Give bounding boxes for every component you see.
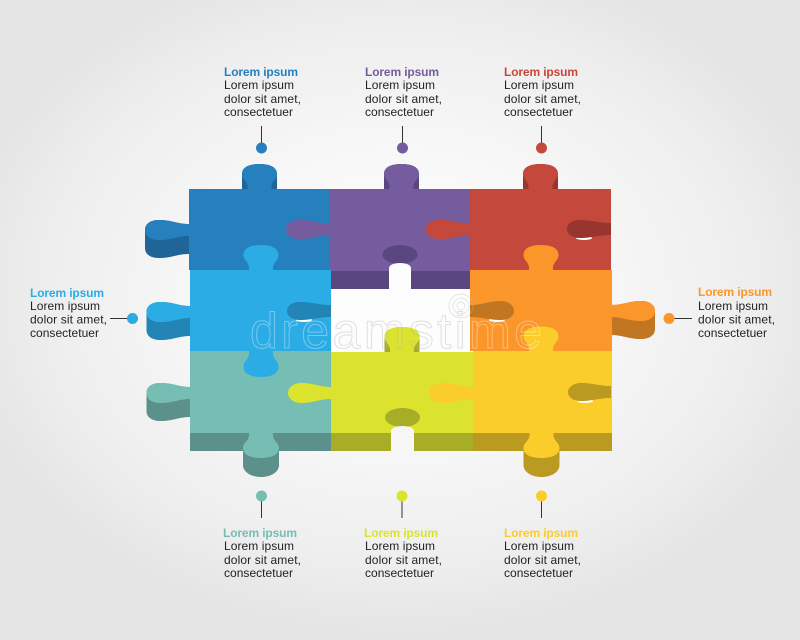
keyhole: orange into red bbox=[524, 245, 558, 270]
text block: top blue: Lorem ipsum bbox=[224, 78, 294, 92]
central empty slot bbox=[331, 285, 471, 353]
knob: yellow green into empty slot bbox=[384, 327, 420, 352]
text block: top purple: Lorem ipsum bbox=[365, 65, 439, 79]
right knob: orange bbox=[611, 301, 655, 339]
piece: light blue bbox=[190, 270, 331, 352]
text block: bottom yellow bbox=[504, 526, 581, 580]
text block: left: Lorem ipsum bbox=[30, 286, 104, 300]
text block: right: Lorem ipsum bbox=[698, 285, 772, 299]
text block: top purple bbox=[365, 65, 442, 119]
text block: top red bbox=[504, 65, 581, 119]
watermark: dreamstime bbox=[250, 303, 542, 359]
tab: red into purple bbox=[426, 220, 471, 239]
text block: bottom yellow: consectetuer bbox=[504, 566, 573, 580]
text block: right: dolor sit amet, bbox=[698, 312, 775, 326]
piece: purple bbox=[330, 189, 470, 289]
keyhole: light blue into teal bbox=[244, 351, 278, 377]
left knob: light blue bbox=[146, 302, 190, 340]
keyhole: yellow into orange bbox=[524, 326, 558, 352]
watermark bbox=[252, 294, 540, 349]
piece: orange bbox=[470, 270, 612, 351]
tab: yellow into yellow green bbox=[429, 383, 474, 403]
text block: bottom teal: Lorem ipsum bbox=[224, 539, 294, 553]
bottom knob: yellow bbox=[524, 445, 560, 477]
text block: left bbox=[30, 286, 107, 340]
keyhole: yellow bottom knob top face bbox=[524, 433, 560, 458]
text block: right: consectetuer bbox=[698, 326, 767, 340]
tab: purple into blue bbox=[286, 220, 331, 239]
piece: blue bbox=[189, 189, 331, 270]
top knob: purple bbox=[384, 164, 419, 189]
text block: bottom yellow: dolor sit amet, bbox=[504, 553, 581, 567]
text block: bottom yellow: Lorem ipsum bbox=[504, 539, 574, 553]
text block: bottom teal: consectetuer bbox=[224, 566, 293, 580]
socket: yellow right bbox=[568, 383, 611, 403]
watermark: dreamstime bbox=[250, 303, 542, 359]
left knob: blue bbox=[145, 220, 189, 258]
text block: top purple: dolor sit amet, bbox=[365, 92, 442, 106]
text block: left: Lorem ipsum bbox=[30, 299, 100, 313]
text block: bottom teal: dolor sit amet, bbox=[224, 553, 301, 567]
text block: top blue: Lorem ipsum bbox=[224, 65, 298, 79]
connector: bottom yellow bbox=[536, 490, 547, 518]
connector: bottom teal bbox=[256, 490, 267, 518]
connector: top blue bbox=[256, 126, 267, 154]
text block: top blue: consectetuer bbox=[224, 105, 293, 119]
piece: yellow green bbox=[331, 352, 473, 451]
keyhole: light blue into blue bbox=[244, 245, 278, 270]
text block: top red: consectetuer bbox=[504, 105, 573, 119]
text block: top blue: dolor sit amet, bbox=[224, 92, 301, 106]
text block: bottom teal bbox=[223, 526, 301, 580]
text block: top red: Lorem ipsum bbox=[504, 78, 574, 92]
socket: red right bbox=[567, 220, 611, 240]
text block: top purple: Lorem ipsum bbox=[365, 78, 435, 92]
piece: red bbox=[470, 189, 611, 270]
socket: light blue right bbox=[287, 302, 331, 322]
piece: yellow bbox=[473, 351, 612, 451]
top knob: blue bbox=[242, 164, 277, 189]
text block: top blue bbox=[224, 65, 301, 119]
tab: yellow green into teal bbox=[288, 383, 332, 403]
text block: bottom yellow green bbox=[364, 526, 442, 580]
text block: top red: dolor sit amet, bbox=[504, 92, 581, 106]
connector: top purple bbox=[397, 126, 408, 154]
bottom knob: teal bbox=[243, 445, 279, 477]
text block: bottom yellow green: Lorem ipsum bbox=[364, 526, 438, 540]
left knob: teal bbox=[146, 383, 190, 421]
socket: yellow green bottom bbox=[385, 408, 420, 452]
connector: left bbox=[110, 313, 138, 324]
text block: bottom yellow green: Lorem ipsum bbox=[365, 539, 435, 553]
text block: right: Lorem ipsum bbox=[698, 299, 768, 313]
text block: left: consectetuer bbox=[30, 326, 99, 340]
socket: orange left bbox=[470, 301, 514, 322]
piece: teal bbox=[190, 351, 331, 451]
text block: bottom teal: Lorem ipsum bbox=[223, 526, 297, 540]
text block: left: dolor sit amet, bbox=[30, 312, 107, 326]
text block: top purple: consectetuer bbox=[365, 105, 434, 119]
text block: bottom yellow green: dolor sit amet, bbox=[365, 553, 442, 567]
connector: top red bbox=[536, 126, 547, 154]
socket: purple bottom bbox=[382, 245, 418, 290]
text block: top red: Lorem ipsum bbox=[504, 65, 578, 79]
connector: bottom yellow green bbox=[396, 490, 408, 518]
keyhole: teal bottom knob top face bbox=[243, 433, 279, 458]
text block: bottom yellow: Lorem ipsum bbox=[504, 526, 578, 540]
top knob: red bbox=[523, 164, 558, 189]
connector: right bbox=[664, 313, 692, 324]
text block: bottom yellow green: consectetuer bbox=[365, 566, 434, 580]
text block: right bbox=[698, 285, 775, 340]
